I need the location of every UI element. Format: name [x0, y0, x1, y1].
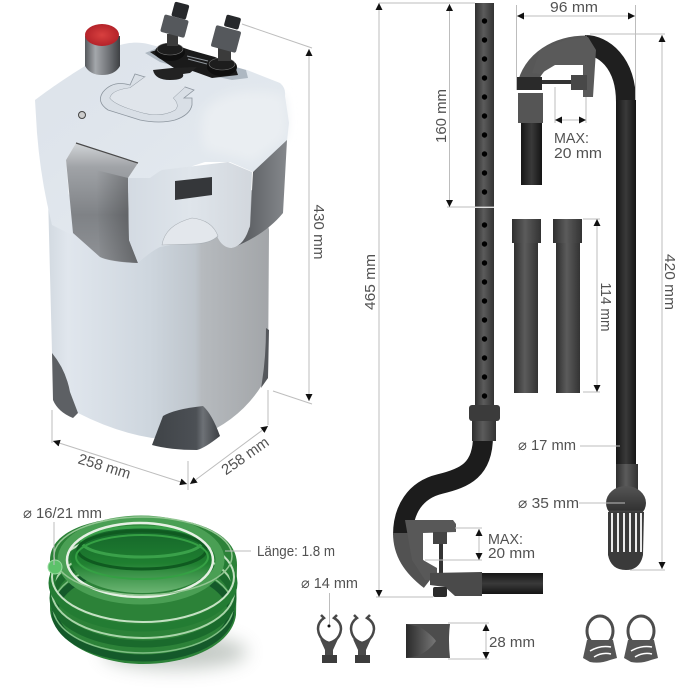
dimension: 160 mm: 160 mm [433, 89, 450, 143]
connector vents [187, 56, 208, 64]
label: clip diameter 14 mm [301, 575, 358, 628]
outlet sleeve [430, 572, 482, 596]
panel top edge [76, 143, 138, 163]
right lid corner highlight [202, 91, 287, 162]
clamp knob [433, 532, 447, 544]
dimension: depth 258 mm [190, 390, 272, 484]
S-shaped outlet pipe [403, 436, 483, 535]
spray bar upper section [475, 3, 494, 207]
front foot [152, 406, 220, 450]
tube 2 shaft [556, 243, 580, 393]
outlet pipe lower arc [403, 533, 430, 580]
dimension: clamp max 20 mm, upper: 20 mm [554, 145, 602, 162]
hose coils [52, 532, 234, 658]
strainer slots [612, 513, 641, 552]
label: hose length [225, 543, 335, 560]
hose cut end [48, 560, 62, 574]
dimension: pipe height 420 mm: 420 mm [661, 254, 678, 310]
handle inner [110, 77, 185, 115]
hose inner opening [71, 527, 213, 593]
connector lever [153, 67, 197, 80]
dimension: clamp max 20 mm, upper [554, 87, 602, 162]
product photo: canister filter [35, 1, 289, 450]
right foot [261, 328, 269, 388]
intake clamp screw [517, 77, 542, 90]
tube 1 shaft [514, 243, 538, 393]
dimension: clamp max 20 mm, lower: MAX: [488, 531, 523, 548]
dimension: tube length 114 mm: 114 mm [597, 282, 614, 332]
spray bar holes [482, 18, 487, 399]
label: pipe diameter 17 mm [518, 437, 620, 454]
dimension: width 258 mm: 258 mm [76, 451, 133, 483]
suction clips [318, 615, 374, 663]
hose shadow [103, 635, 247, 669]
intake pipe bend, grey part [526, 45, 587, 88]
label: hose length: Länge: 1.8 m [257, 543, 335, 560]
intake pipe bend, black part [585, 45, 626, 102]
front left panel [66, 143, 138, 263]
label: strainer diameter 35 mm [518, 495, 625, 512]
clip 2 [351, 615, 374, 663]
dimension: width 258 mm [52, 410, 188, 490]
clip 1 [318, 615, 341, 663]
dimension: spray bar length 465 mm: 465 mm [362, 254, 379, 310]
left connector [155, 1, 190, 61]
right connector [207, 14, 241, 76]
intake pipe straight section [616, 100, 636, 465]
intake clamp knob [571, 75, 587, 90]
strainer ball [606, 486, 646, 520]
top hose ring [62, 520, 220, 600]
intake pipe [517, 37, 646, 570]
strainer basket [608, 512, 644, 570]
panel right shading [96, 170, 138, 263]
hose clamps [583, 616, 658, 663]
dimension: nozzle 28 mm: 28 mm [489, 634, 535, 651]
label: strainer diameter 35 mm: ⌀ 35 mm [518, 495, 579, 512]
hose stack body [50, 517, 237, 664]
latch window [175, 177, 212, 200]
label: clip diameter 14 mm: ⌀ 14 mm [301, 575, 358, 592]
outlet nozzle [406, 624, 450, 658]
tube 1 collar [512, 219, 541, 243]
dimension: clamp max 20 mm, lower: 20 mm [488, 545, 535, 562]
tube 2 collar [553, 219, 582, 243]
intake clamp head [532, 37, 596, 97]
inner hose loops [76, 527, 208, 579]
clamp rod [439, 544, 443, 576]
connector block [150, 45, 238, 78]
lid and skirt [35, 43, 289, 235]
left foot [52, 353, 78, 418]
nozzle funnel [406, 624, 436, 658]
handle recess [100, 74, 194, 122]
dimension: clamp max 20 mm, lower [425, 528, 535, 562]
coupling sleeve [472, 421, 496, 441]
extension tubes [512, 219, 582, 393]
dimension: height 430 mm: 430 mm [310, 204, 327, 260]
valve badge [162, 218, 218, 245]
valve plate [145, 47, 248, 80]
short black pipe [521, 123, 542, 185]
power button [85, 24, 120, 75]
clamp 1 [583, 616, 617, 663]
label: hose diameter: ⌀ 16/21 mm [23, 505, 102, 522]
dimension: depth 258 mm: 258 mm [218, 434, 272, 479]
label: hose diameter [23, 505, 102, 565]
pipe coupling nut [469, 405, 500, 421]
front right panel [232, 140, 287, 248]
clamp screw [433, 587, 447, 597]
outlet black tube [482, 573, 543, 594]
dimension: height 430 mm [242, 24, 327, 404]
hose coil [48, 517, 247, 669]
dimension: pipe width 96 mm [516, 0, 636, 100]
short pipe sleeve [518, 93, 543, 123]
intake clamp rod [542, 80, 574, 84]
strainer neck [616, 464, 638, 490]
dimension: nozzle 28 mm [448, 623, 535, 659]
dimension: clamp max 20 mm, upper: MAX: [554, 130, 589, 147]
clamp 2 [624, 616, 658, 663]
label: pipe diameter 17 mm: ⌀ 17 mm [518, 437, 576, 454]
outlet clamp [405, 520, 456, 580]
perforated spray bar [403, 3, 543, 597]
spray bar lower section [475, 208, 494, 406]
centre bump [128, 162, 252, 263]
screw [78, 112, 86, 118]
filter body [48, 190, 269, 438]
